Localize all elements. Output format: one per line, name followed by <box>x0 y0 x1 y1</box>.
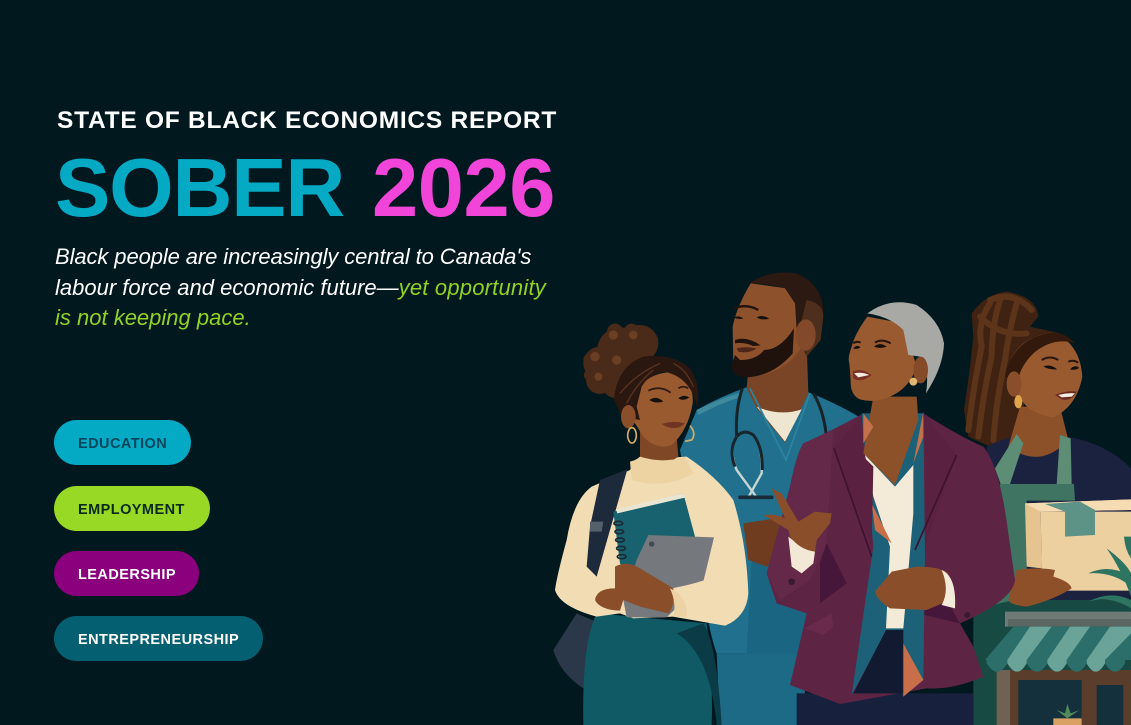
pill: entrepreneurship <box>54 616 263 661</box>
pill: leadership <box>54 551 199 596</box>
pill: entrepreneurship: ENTREPRENEURSHIP <box>78 632 239 648</box>
storefront with awning <box>985 612 1131 725</box>
pill: education <box>54 420 191 465</box>
main title: SOBER 2026 <box>55 141 555 234</box>
pill: employment <box>54 486 210 531</box>
pill: education: EDUCATION <box>78 436 167 452</box>
main title: SOBER 2026: SOBER <box>55 141 344 234</box>
main title: SOBER 2026: 2026 <box>372 141 555 234</box>
intro statement: labour force and economic future—yet opportunity <box>55 274 546 300</box>
subtitle: report name: STATE OF BLACK ECONOMICS REPORT <box>57 107 557 134</box>
figure: nurse with stethoscope <box>680 272 860 725</box>
figure: student with notebook and tablet <box>553 324 748 725</box>
pill: leadership: LEADERSHIP <box>78 567 176 583</box>
figure: shop owner with parcel <box>964 292 1131 725</box>
intro statement: is not keeping pace. <box>55 305 251 330</box>
intro statement <box>55 244 547 330</box>
intro statement: Black people are increasingly central to Canada's <box>55 244 531 269</box>
pill: employment: EMPLOYMENT <box>78 502 185 518</box>
figure: senior woman in plum blazer <box>763 302 1015 725</box>
